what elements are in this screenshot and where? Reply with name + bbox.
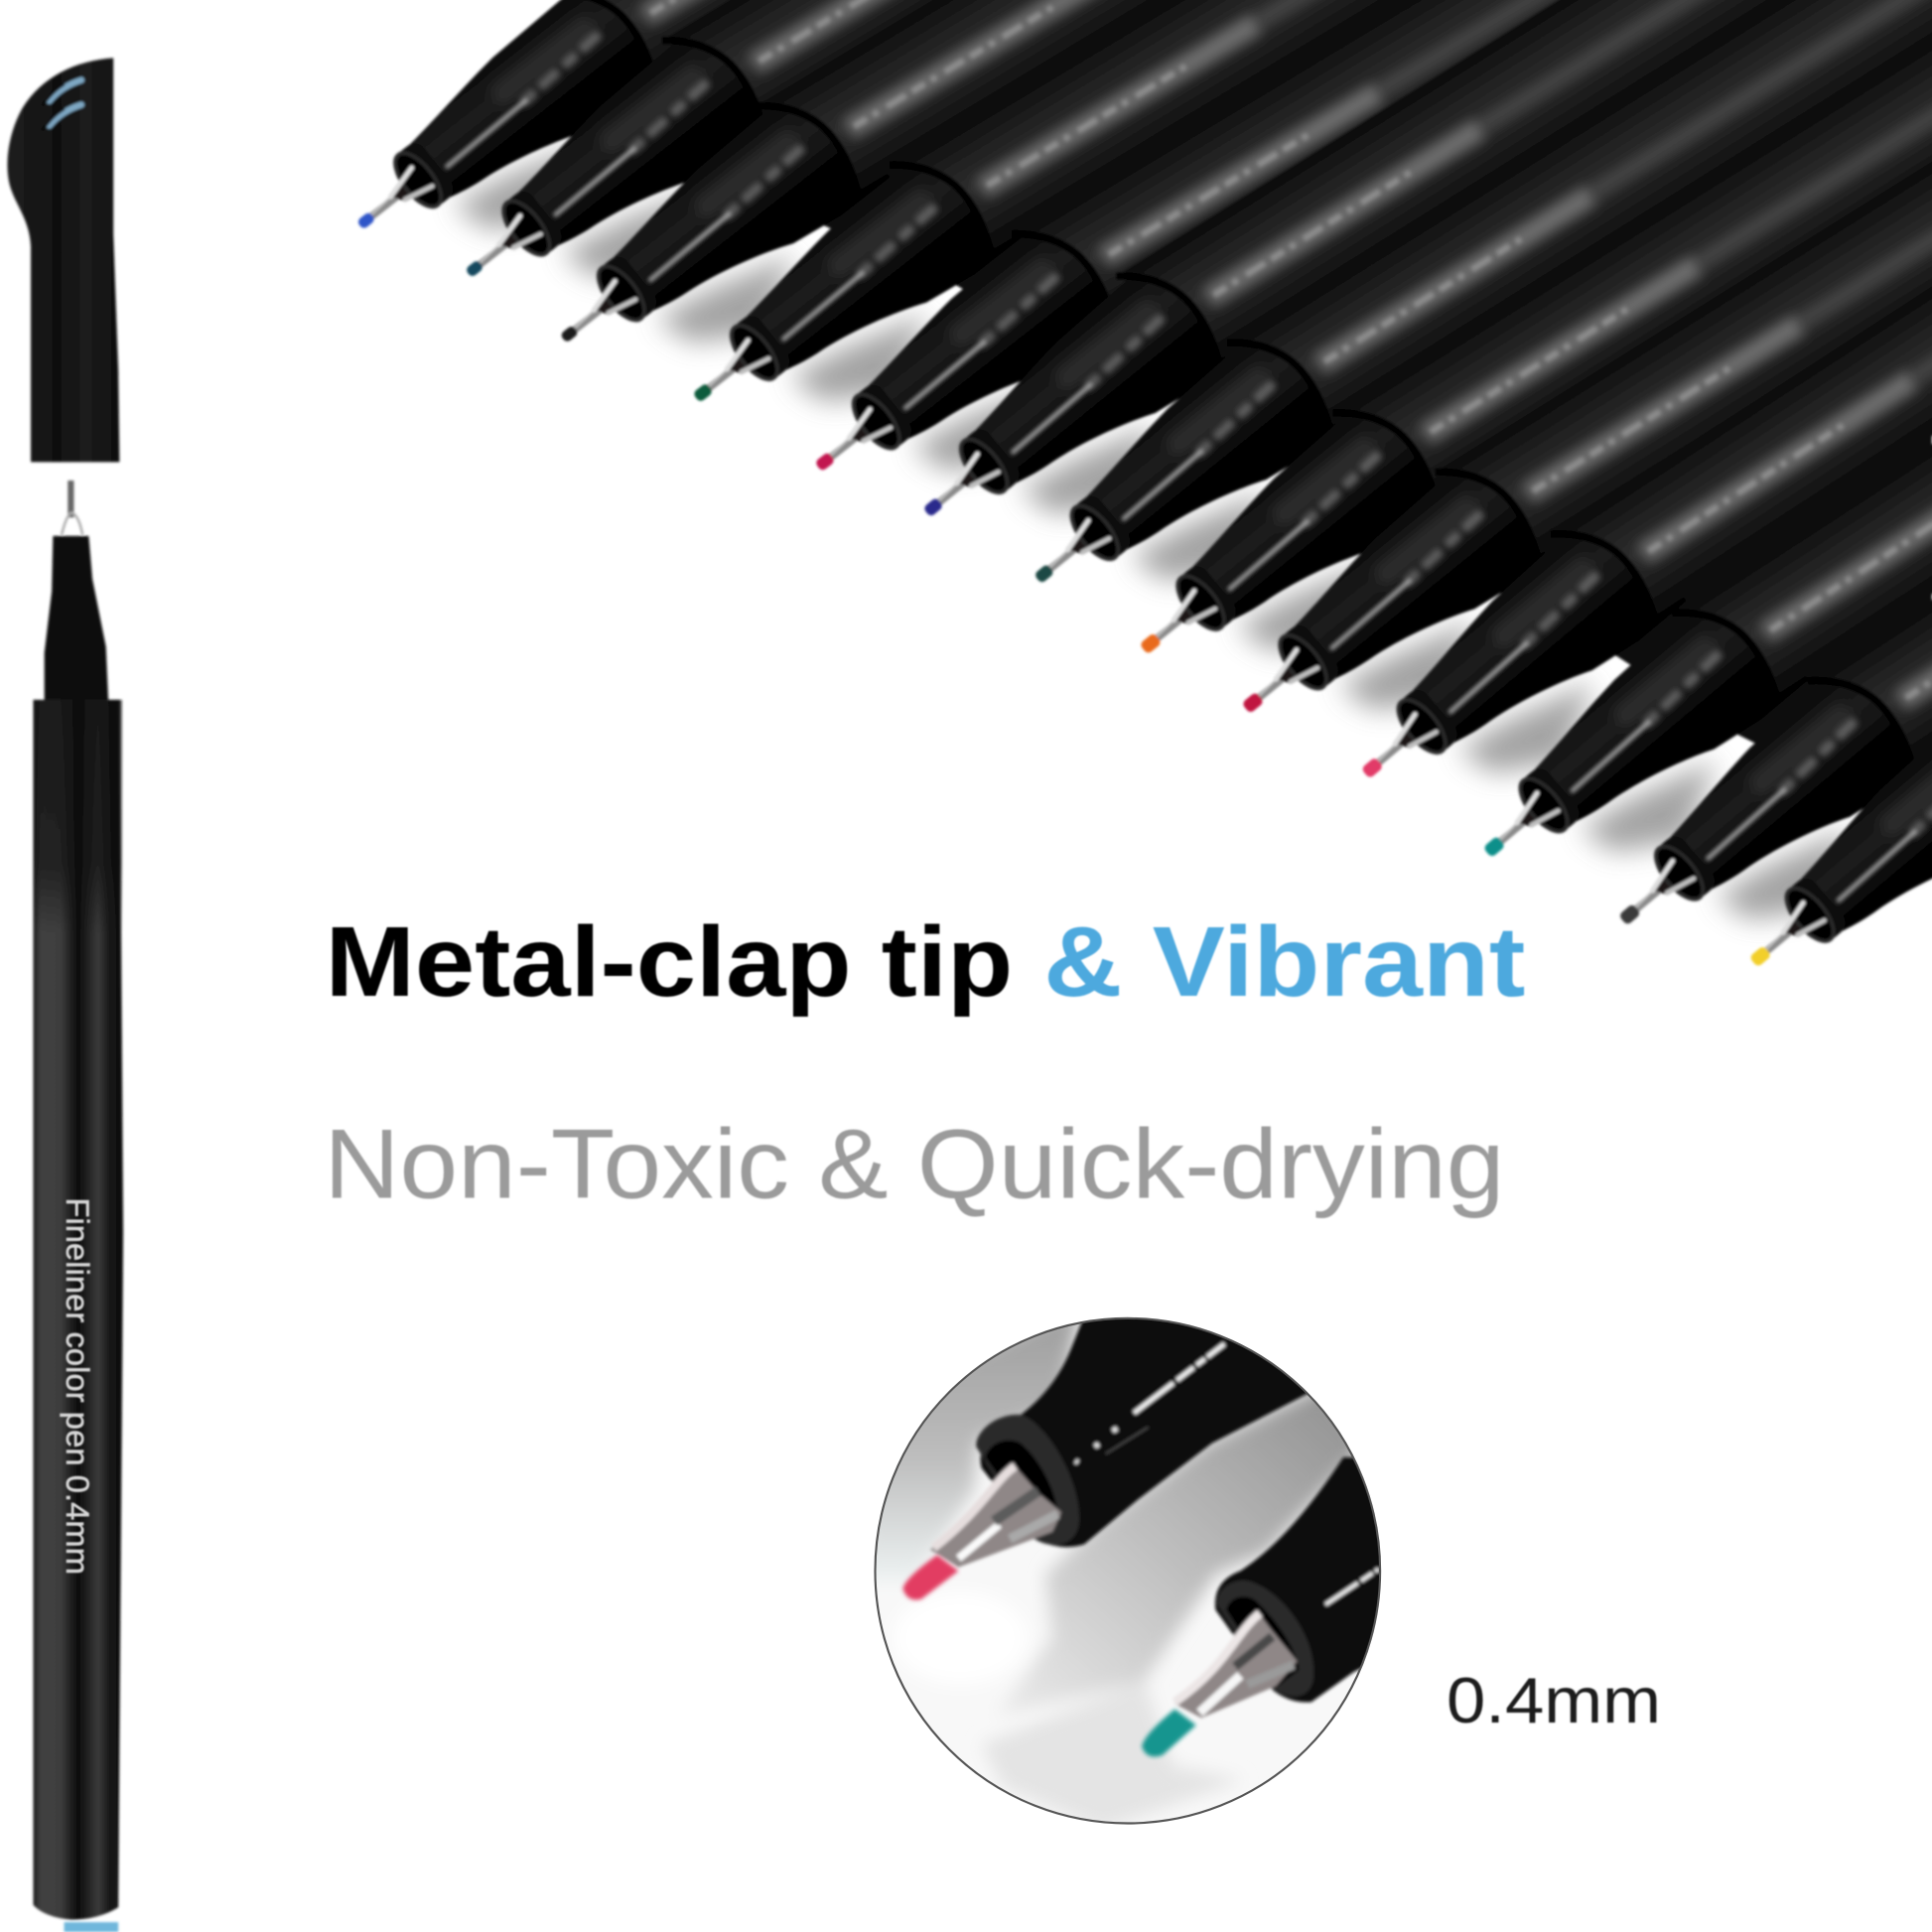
pen 12: grey tip [1582,0,1932,1164]
lower pen ring [1217,1581,1313,1697]
pen 4: green tip [656,0,1932,648]
pen set: shadows under the pens [454,114,1878,956]
heading part: black: Metal-clap tip [326,906,1013,1018]
blue pen end [65,1922,118,1932]
pen 7: dark green tip [997,0,1932,826]
circle close-up of two pen tips [874,1316,1382,1825]
subheading: Non-Toxic & Quick-drying [324,1109,1504,1219]
lower pen body [1174,1457,1407,1718]
pen 13: yellow tip [1712,0,1932,1205]
pen 6: indigo tip [886,0,1932,759]
icon: pen metal nib [62,481,82,535]
pen 2: dark teal tip [429,0,1932,524]
single pen with cap on the left [7,58,123,1932]
pen 5: crimson tip [778,0,1932,717]
pen barrel [34,700,123,1920]
heading: Metal-clap tip & Vibrant [326,906,1525,1018]
upper pen coloured nib [902,1555,958,1599]
upper pen metal [930,1462,1061,1568]
lower pen coloured nib [1142,1709,1196,1756]
pen barrel label: Fineliner color pen 0.4mm [60,1197,95,1575]
heading part: blue: & Vibrant [1043,906,1525,1018]
pen 10: pink tip [1323,0,1932,1017]
circle outline [875,1318,1380,1824]
tip size label: 0.4mm [1447,1665,1661,1736]
upper pen body [930,1315,1314,1568]
lower pen metal [1174,1609,1298,1718]
pen 3: black tip [523,0,1932,589]
pen 9: red tip [1205,0,1932,955]
icon: pen cap [7,58,119,462]
pen 1: blue tip [320,0,1932,476]
pen 11: teal tip [1446,0,1932,1096]
upper pen ring [976,1415,1079,1545]
pen 8: orange tip [1103,0,1932,897]
pen grip cone [45,536,108,702]
pen set: fan of 13 fineliner pens [320,0,1932,1205]
